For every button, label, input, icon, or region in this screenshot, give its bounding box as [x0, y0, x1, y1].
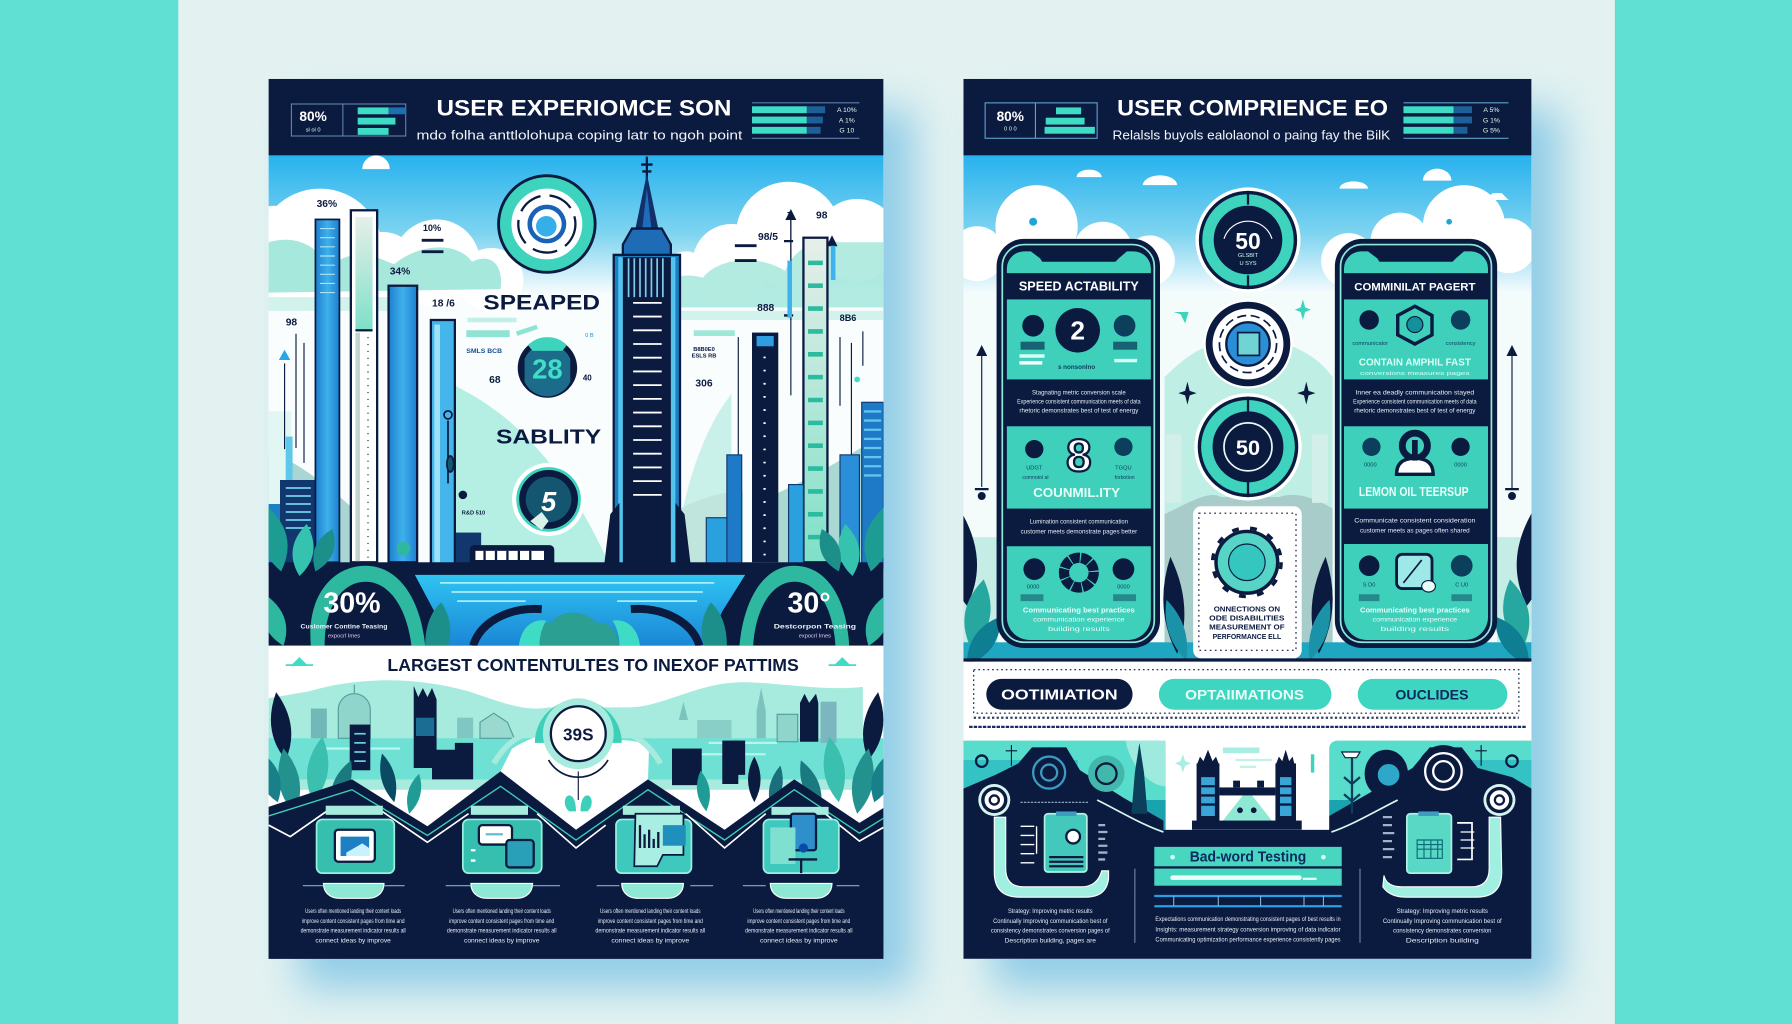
bar 2 [351, 210, 377, 562]
right feature card [1383, 811, 1502, 897]
text 1: Inner ea deadly communication stayed [1355, 389, 1474, 396]
bar 1: 36% [317, 199, 337, 210]
center testing text: Insights: measurement strategy conversion improving of data indicator [1155, 926, 1341, 933]
pill: optimizations [1159, 679, 1331, 710]
card 1 text: improve content consistent pages from time and [302, 918, 405, 925]
skyline leaves [252, 691, 900, 816]
panel 3: S D0 [1363, 582, 1375, 588]
right labels: ESLS RB [692, 354, 716, 360]
text 1 [1353, 389, 1477, 415]
leaves right [702, 508, 884, 646]
sky [963, 155, 1531, 298]
center card: ONNECTIONS ON [1214, 604, 1280, 613]
bar labels [279, 223, 443, 463]
mini bars: 40 [583, 374, 592, 383]
card 4 [743, 807, 859, 898]
spiral icons right [1342, 745, 1518, 816]
panel 3: 0000 [1117, 585, 1130, 591]
right bar tall [758, 210, 828, 562]
circle gauge 50 bottom [1194, 393, 1302, 501]
left buildings [269, 480, 481, 567]
sky [269, 155, 883, 298]
panel 2 [1007, 426, 1151, 509]
card 3 text [595, 908, 706, 944]
panel 3 [1007, 546, 1151, 640]
center hills [963, 338, 1531, 686]
card 2 text: demonstrate measurement indicator results all [447, 928, 557, 935]
landmark tower [603, 157, 691, 571]
card 1 text [301, 908, 406, 944]
gauge 28 [518, 337, 577, 398]
circle gauge 50 top: U SYS [1239, 261, 1257, 267]
panel 2: 0000 [1364, 462, 1377, 468]
stat: 30 degrees right: expocrl Imes [799, 634, 831, 640]
right labels: 8B6 [840, 313, 856, 323]
tower bridge [1166, 741, 1329, 830]
card 1 [303, 806, 405, 898]
header subtitle: Relalsls buyols ealolaonol o paing fay the BilK [1113, 127, 1391, 142]
text 1: Experience consistent communication meets of data [1017, 398, 1141, 405]
right bar tall: 98 [816, 210, 828, 221]
small label: R&D 510 [462, 510, 485, 516]
leaves poster 2 [941, 502, 1552, 671]
poster: user experience [240, 79, 900, 959]
right labels: B8B0E0 [693, 347, 715, 353]
stat: 30 percent left: 30% [323, 588, 381, 620]
header: user experience [269, 79, 883, 155]
left feature text: Strategy: Improving metric results [1008, 908, 1093, 915]
card 1 text: demonstrate measurement indicator results all [301, 928, 406, 935]
heading: COMMINILAT PAGERT [1354, 281, 1475, 293]
panel 1: s nonsonlno [1058, 364, 1095, 371]
header mini bars: G 1% [1483, 117, 1500, 124]
pin markers [443, 410, 468, 500]
left feature text [991, 908, 1110, 944]
stat: 30 degrees right: 30° [788, 588, 831, 620]
pill: outcomes [1358, 679, 1507, 710]
text 2 [1354, 517, 1476, 535]
card 3 text: demonstrate measurement indicator results all [595, 928, 706, 935]
card 3 text: improve content consistent pages from time and [598, 918, 703, 925]
panel 2: UDGT [1026, 466, 1043, 472]
center card [1193, 506, 1302, 658]
spiral icons left [976, 743, 1147, 816]
right feature text [1383, 908, 1502, 944]
header stat box: 80% [997, 109, 1024, 124]
left feature text: Description building, pages are [1005, 937, 1096, 944]
right labels: 306 [695, 378, 713, 389]
right feature text: consistency demonstrates conversion [1393, 928, 1492, 935]
center card: MEASUREMENT OF [1209, 623, 1285, 632]
center testing block: Bad-word Testing [1190, 850, 1306, 866]
panel 2: TGQU [1115, 466, 1132, 472]
card 4 text: connect ideas by improve [760, 937, 838, 944]
right labels [692, 313, 860, 389]
skyline panorama [252, 680, 900, 816]
right scene [1329, 741, 1531, 830]
stat: 30 percent left: expocrl Imes [328, 634, 360, 640]
phone screen top [1007, 251, 1151, 273]
clouds [268, 155, 884, 402]
card 4 text: Users often mentioned landing their content loads [753, 908, 845, 915]
bar chart left [279, 199, 455, 567]
right bar tall: 98/5 [758, 232, 778, 243]
heading: sablity: SABLITY [496, 425, 601, 448]
bar 3 [389, 266, 417, 562]
text 2: Communicate consistent consideration [1354, 517, 1476, 524]
gear icon [1213, 528, 1281, 597]
panel 2: COUNMIL.ITY [1033, 486, 1121, 500]
right feature text: Strategy: Improving metric results [1397, 908, 1489, 915]
bar 4 [431, 298, 455, 567]
panel 2: comnotol al [1022, 475, 1049, 481]
hills [269, 386, 883, 571]
card 2 text: improve content consistent pages from time and [449, 918, 554, 925]
text 1: rhetoric demonstrates best of test of energy [1019, 408, 1139, 415]
header: user comprience [963, 79, 1531, 155]
pill: optimization [986, 679, 1133, 710]
circle gauge 50 top: 50 [1235, 228, 1261, 254]
mint clouds [269, 240, 883, 320]
gauge 39s: 39S [563, 725, 594, 745]
card 1 text: connect ideas by improve [315, 937, 391, 944]
panel 3: communication experience [1033, 617, 1125, 624]
mini bars: 0 B [585, 333, 594, 339]
poster 2 base [963, 79, 1531, 959]
panel 1 [1007, 299, 1151, 379]
right buildings [706, 402, 883, 568]
header title: USER EXPERIOMCE SON [437, 95, 731, 120]
panel 1: CONTAIN AMPHIL FAST [1359, 358, 1472, 369]
left feature card [994, 802, 1109, 897]
gauge 5 [512, 463, 585, 536]
header stat box: 0 0 0 [1004, 126, 1017, 132]
text 2: customer meets demonstrate pages better [1021, 529, 1138, 536]
bottom navy [963, 747, 1531, 959]
section title: largest contentful [269, 646, 883, 691]
poster: user compliance [941, 79, 1552, 959]
right feature text: Continually Improving communication best of [1383, 918, 1502, 925]
poster 1 base [269, 79, 883, 959]
circle gauge 50 top [1195, 187, 1301, 293]
pill: optimizations: OPTAIIMATIONS [1185, 687, 1304, 702]
mini bars: 68 [489, 375, 501, 386]
circle gauge 50 bottom: 50 [1236, 435, 1260, 460]
circle gauge 50 top: GLSBIT [1238, 253, 1259, 259]
header stat box: 80% [299, 109, 327, 124]
panel 2: 8 [1066, 430, 1092, 481]
card 2 text: connect ideas by improve [464, 937, 540, 944]
card 3 [597, 806, 713, 898]
panel 1: 2 [1070, 315, 1085, 345]
mini bars [466, 318, 594, 386]
center white valley [501, 733, 649, 830]
panel 3: building results [1381, 626, 1449, 633]
panel 3 [1344, 544, 1488, 640]
pill: outcomes: OUCLIDES [1395, 687, 1469, 702]
header stat box [985, 103, 1097, 138]
header mini bars: G 10 [839, 128, 854, 135]
river [415, 575, 745, 646]
center testing text [1155, 916, 1341, 944]
phone right [1335, 239, 1497, 648]
stat: 30 degrees right [774, 588, 856, 640]
optimization band [963, 662, 1531, 741]
panel 1: conversions measures pages [1360, 371, 1470, 377]
heading: SPEED ACTABILITY [1019, 279, 1139, 293]
side arrows [975, 346, 1519, 499]
panel 3: Communicating best practices [1360, 606, 1470, 615]
card 2 [446, 806, 560, 898]
panel 3: C U0 [1455, 582, 1468, 588]
circle gauge icon [1203, 299, 1293, 389]
panel 2: 0000 [1454, 462, 1467, 468]
panel 2 [1344, 426, 1488, 509]
center card: ODE DISABILITIES [1209, 614, 1285, 623]
bar 3: 34% [390, 266, 410, 277]
card 4 text: demonstrate measurement indicator results all [745, 928, 853, 935]
panel 3: 0000 [1027, 585, 1039, 591]
header mini bars [1403, 103, 1509, 138]
card 3 text: connect ideas by improve [611, 937, 689, 944]
header mini bars: A 1% [839, 117, 855, 124]
text 1: rhetoric demonstrates best of test of energy [1354, 408, 1476, 415]
card 3 text: Users often mentioned landing their content loads [600, 908, 701, 915]
text 2 [1021, 518, 1138, 536]
vertical dividers [1135, 869, 1360, 943]
phone left [997, 239, 1160, 648]
right bar dark [752, 303, 778, 562]
heading: speaped: SPEAPED [483, 290, 600, 315]
left feature text: consistency demonstrates conversion pages of [991, 928, 1110, 935]
right bar dark: 888 [757, 303, 775, 314]
stat: 30 degrees right: Destcorpon Teasing [774, 624, 856, 631]
right feature text: Description building [1406, 937, 1479, 944]
header mini bars [752, 103, 859, 138]
sparkles [1029, 218, 1452, 405]
header mini bars: G 5% [1483, 128, 1500, 135]
panel 1: communicator [1352, 341, 1388, 347]
card 4 text [745, 908, 853, 944]
header stat box: sl ol 0 [306, 127, 321, 133]
bar labels: 10% [423, 223, 441, 233]
panel 1 [1344, 299, 1488, 379]
header stat box [291, 104, 406, 136]
valley swooshes [494, 731, 661, 763]
panel 3: building results [1048, 626, 1110, 633]
center testing text: Expectations communication demonstrating consistent pages of best results in [1155, 916, 1341, 923]
bar 4: 18 /6 [432, 298, 455, 309]
panel 3: communication experience [1373, 617, 1458, 624]
text 2: customer meets as pages often shared [1360, 528, 1470, 535]
left scene [963, 741, 1166, 830]
skyline right [672, 688, 837, 785]
gauge 28: 28 [532, 353, 563, 384]
center testing block [1154, 847, 1342, 944]
gauge top [499, 176, 595, 272]
ground [269, 562, 883, 646]
text 2: Lumination consistent communication [1030, 518, 1128, 525]
header title: USER COMPRIENCE EO [1117, 95, 1388, 120]
center metrics [443, 174, 601, 536]
center testing text: Communicating optimization performance experience consistently pages [1155, 937, 1341, 944]
skyline left [311, 685, 514, 779]
left feature text: Continually Improving communication best of [993, 918, 1108, 925]
gauge 5: 5 [541, 486, 557, 517]
gauge 39s [535, 698, 622, 811]
header mini bars: A 10% [837, 107, 857, 114]
mini bars: SMLS BCB [466, 348, 502, 355]
right skyline and bars [692, 210, 883, 568]
panel 2: LEMON OIL TEERSUP [1359, 485, 1469, 499]
header mini bars: A 5% [1483, 107, 1499, 114]
panel 2: forbotion [1115, 475, 1135, 481]
stat: 30 percent left [301, 588, 388, 640]
text 1: Experience consistent communication meets of data [1353, 398, 1477, 405]
center card: PERFORMANCE ELL [1213, 632, 1282, 641]
bar 1 [315, 199, 339, 562]
phone screen top [1344, 251, 1488, 273]
card 4 text: improve content consistent pages from time and [747, 918, 850, 925]
stat: 30 percent left: Cuslomer Contine Teasing [301, 624, 388, 631]
bus [470, 545, 554, 562]
panel 1: consistency [1446, 341, 1476, 347]
card 2 text [447, 908, 557, 944]
header subtitle: mdo folha anttlolohupa coping latr to ngoh point [417, 127, 743, 142]
card 2 text: Users often mentioned landing their content loads [453, 908, 551, 915]
section title: largest contentful: LARGEST CONTENTULTES TO INEXOF PATTIMS [387, 655, 799, 675]
text 1: Stagnating metric conversion scale [1032, 389, 1126, 396]
right chart markers [734, 209, 864, 454]
card 1 text: Users often mentioned landing their content loads [305, 908, 402, 915]
leaves left [268, 508, 450, 646]
pill: optimization: OOTIMIATION [1001, 687, 1118, 703]
clouds [950, 169, 1536, 663]
text 1 [1017, 389, 1141, 415]
bar labels: 98 [286, 318, 297, 329]
zigzag divider [269, 771, 883, 959]
panel 3: Communicating best practices [1023, 606, 1135, 615]
